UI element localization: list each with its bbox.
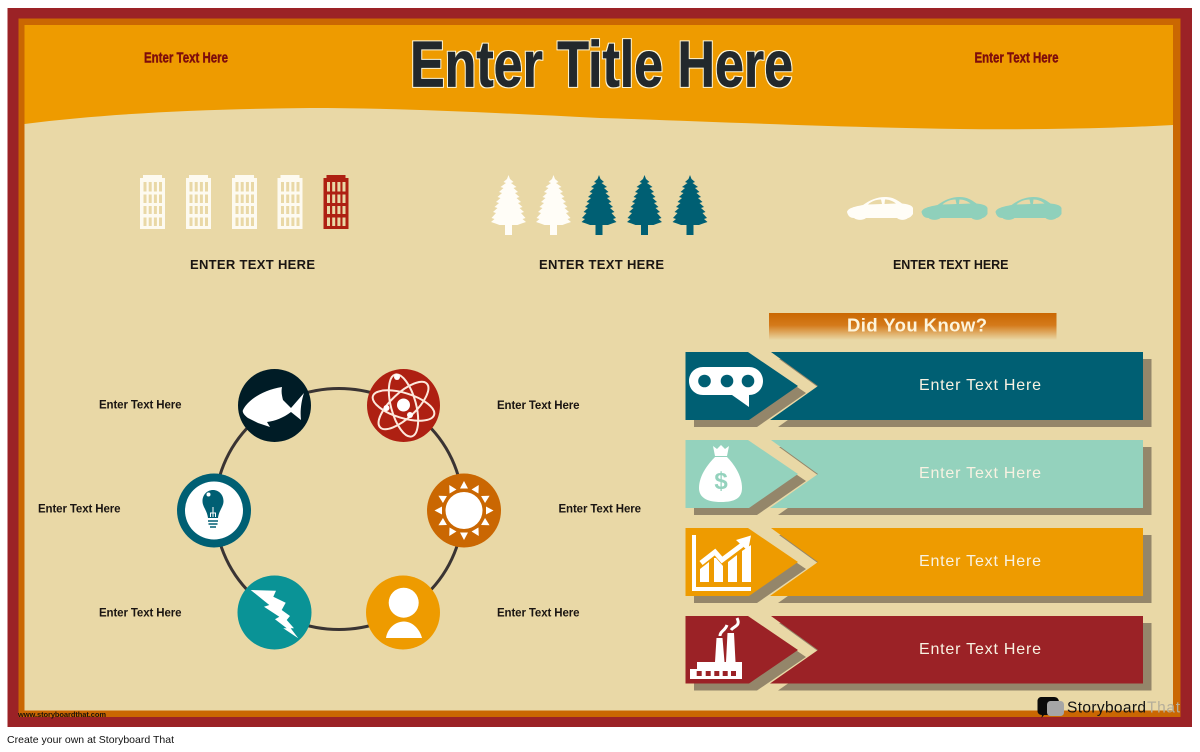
ring label: bulb: Enter Text Here (38, 504, 120, 516)
bar: speech (686, 352, 1152, 427)
did you know banner: Did You Know? (847, 314, 987, 336)
node: light bulb (177, 474, 251, 548)
ring label: sun: Enter Text Here (558, 504, 641, 516)
icon row: buildings (140, 175, 348, 229)
title: Enter Title Here (410, 28, 793, 100)
storyboard that logo: Storyboard (1067, 700, 1146, 716)
icon row: cars (847, 197, 1062, 220)
header wave band (24, 25, 1173, 129)
icon: factory (690, 618, 742, 679)
node: sun (427, 474, 501, 548)
bar: growth chart (686, 528, 1152, 603)
header text right: Enter Text Here (974, 50, 1058, 66)
node: lightning (238, 576, 312, 650)
bar: speech: Enter Text Here (919, 377, 1041, 394)
icon: speech bubble (689, 367, 763, 407)
ring label: fish: Enter Text Here (99, 400, 182, 412)
bar: money: Enter Text Here (919, 465, 1041, 482)
bar: factory (686, 616, 1152, 690)
storyboard that logo (1038, 697, 1181, 718)
cars caption: ENTER TEXT HERE (893, 258, 1008, 272)
icon: money bag: $ (714, 468, 728, 495)
node: fish (238, 369, 311, 442)
storyboard that logo: That (1147, 700, 1181, 716)
icon row: trees (491, 175, 708, 235)
ring label: atom: Enter Text Here (497, 400, 580, 412)
node: atom (367, 369, 440, 442)
buildings caption: ENTER TEXT HERE (190, 257, 315, 272)
did you know banner (769, 313, 1056, 340)
bar: factory: Enter Text Here (919, 641, 1041, 658)
trees caption: ENTER TEXT HERE (539, 257, 664, 272)
node: person (366, 576, 440, 650)
ring label: lightning: Enter Text Here (99, 608, 182, 620)
header text left: Enter Text Here (144, 50, 228, 66)
icon: money bag (699, 445, 742, 502)
icon: growth chart (692, 535, 751, 591)
footer url: www.storyboardthat.com (17, 710, 106, 719)
bar: growth chart: Enter Text Here (919, 553, 1041, 570)
bar: money (686, 440, 1152, 515)
connecting ring (215, 388, 463, 630)
bottom credit: Create your own at Storyboard That (7, 734, 174, 746)
ring label: person: Enter Text Here (497, 608, 580, 620)
ring diagram (177, 369, 501, 650)
